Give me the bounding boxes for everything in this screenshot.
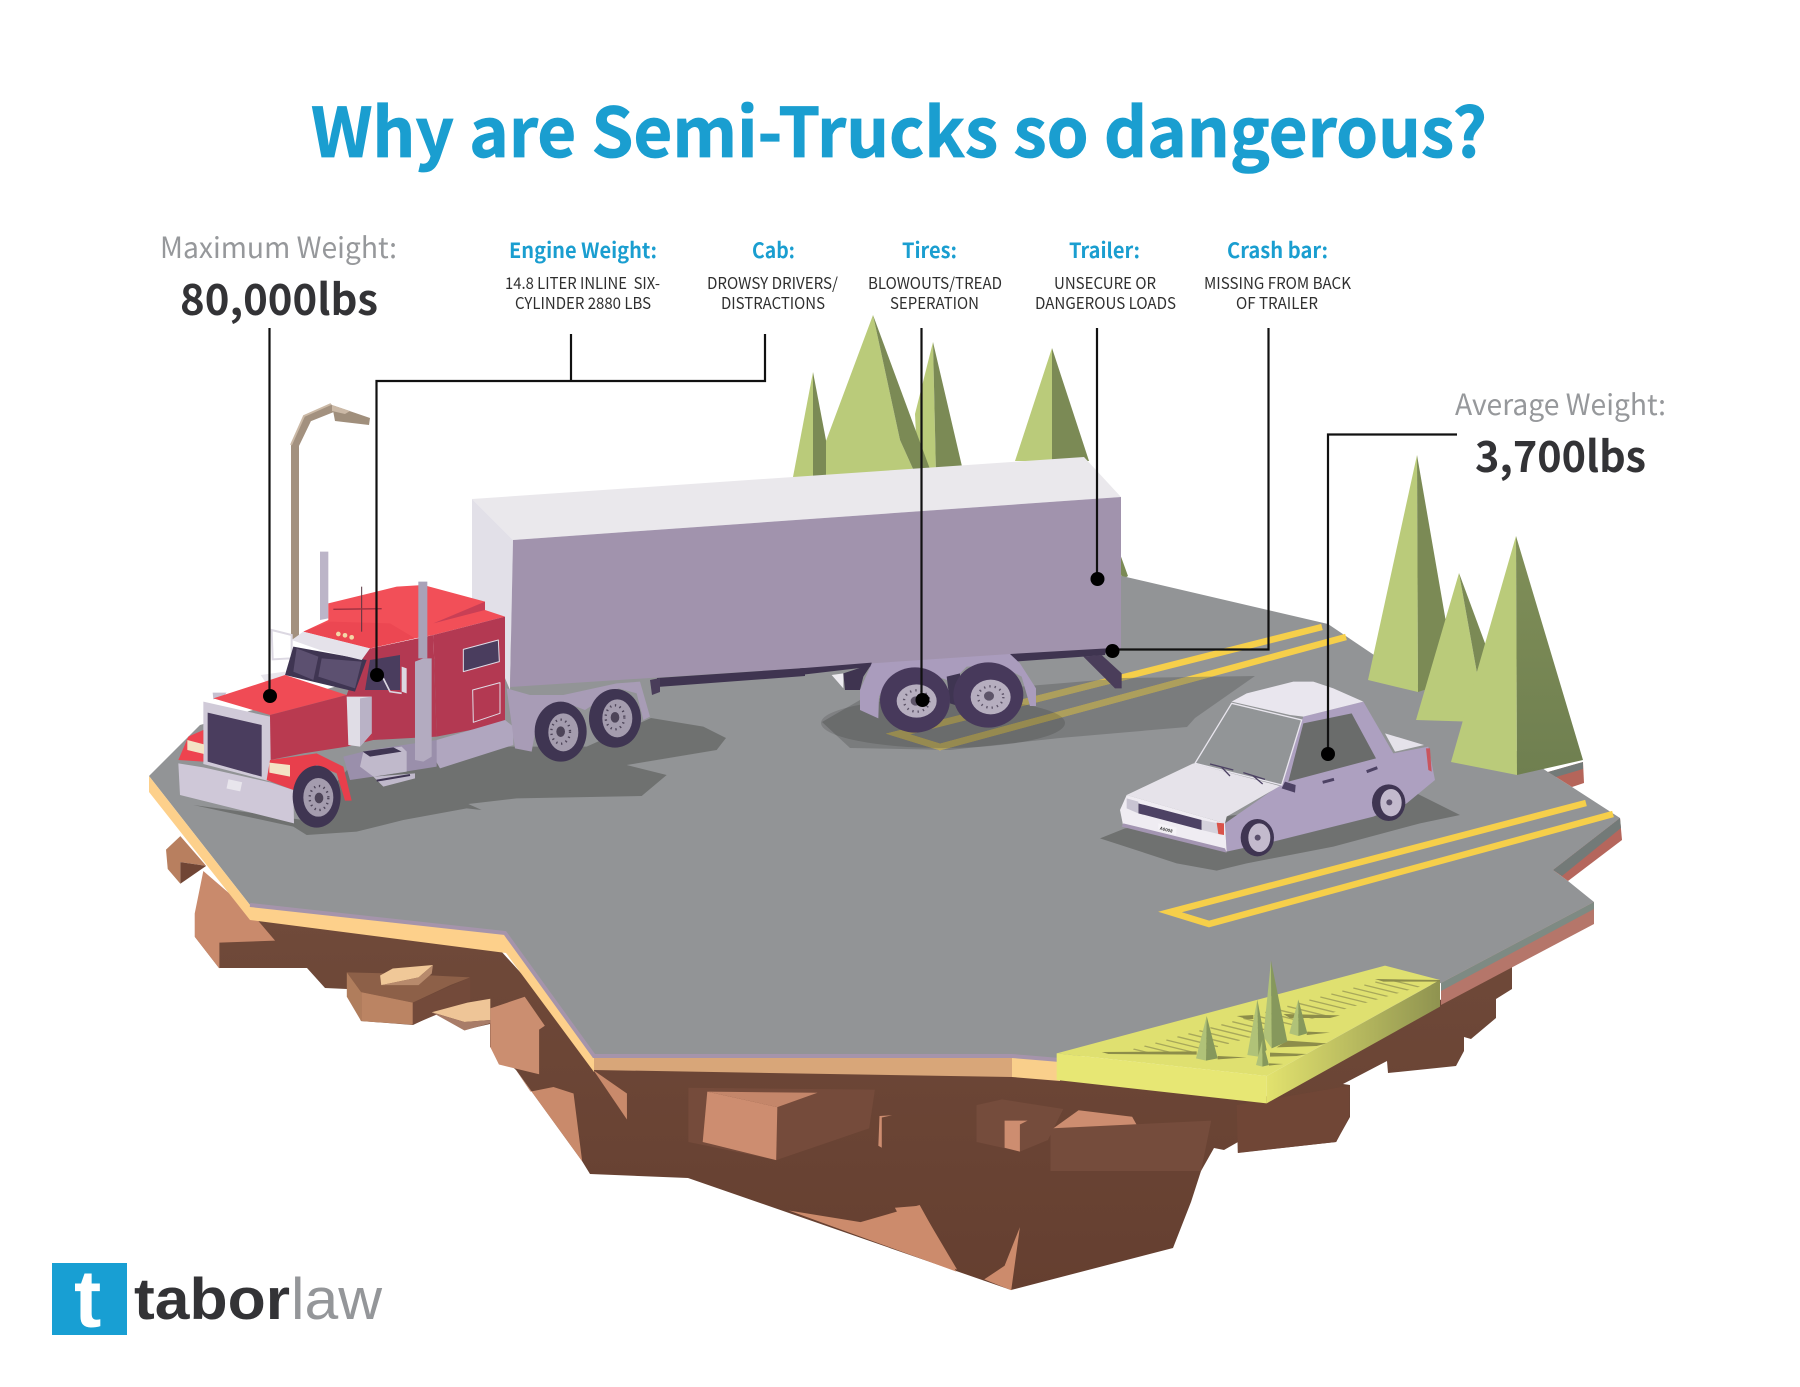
yellow road lines bbox=[898, 627, 1613, 924]
callout: crash bar: Crash bar: bbox=[1227, 235, 1328, 265]
front wheel bbox=[293, 766, 341, 828]
cab side bbox=[433, 617, 505, 737]
antenna bbox=[360, 587, 363, 632]
hatched planting strip bbox=[1133, 982, 1420, 1052]
logo bbox=[52, 1254, 383, 1345]
hood bbox=[1127, 763, 1280, 823]
callout: trailer bbox=[1035, 235, 1176, 586]
trailer bbox=[472, 457, 1121, 695]
skirt bbox=[1122, 823, 1227, 853]
logo: t bbox=[74, 1254, 101, 1345]
headlights left bbox=[187, 740, 204, 754]
windshield surround bbox=[285, 647, 367, 692]
bumper bbox=[178, 763, 294, 823]
frame bbox=[343, 740, 437, 780]
sun visor bbox=[292, 632, 370, 660]
callout: tires: Tires: bbox=[902, 235, 957, 265]
callout: tires bbox=[868, 235, 1002, 707]
trailer fender bbox=[507, 682, 650, 752]
lamp post bbox=[291, 404, 370, 640]
rear drive wheel 2 bbox=[589, 689, 641, 748]
callout: tires: SEPERATION bbox=[890, 290, 979, 314]
callout: trailer: Trailer: bbox=[1069, 235, 1140, 265]
grille bbox=[1138, 803, 1202, 830]
front wheel bbox=[1241, 819, 1274, 856]
rock facets, lit faces on the left bbox=[166, 836, 956, 1272]
callout: cab: Cab: bbox=[752, 235, 795, 265]
sleeper door bbox=[473, 683, 500, 722]
steps bbox=[360, 747, 407, 777]
headlights right bbox=[269, 763, 290, 777]
road edge highlight bbox=[250, 905, 1060, 1060]
callout: crash bar: OF TRAILER bbox=[1236, 290, 1318, 314]
callout: engine weight: Engine Weight: bbox=[509, 235, 657, 265]
air cleaner behind hood bbox=[261, 672, 285, 684]
trees behind trailer bbox=[793, 315, 1128, 580]
callout: trailer: DANGEROUS LOADS bbox=[1035, 290, 1176, 314]
logo: tabor bbox=[134, 1267, 290, 1332]
indicator bbox=[1217, 823, 1224, 835]
callout: cab bbox=[370, 235, 839, 682]
callout: cab: DISTRACTIONS bbox=[721, 290, 825, 314]
callout: crash bar bbox=[1106, 235, 1352, 658]
roof bbox=[1232, 682, 1363, 717]
rear drive wheel 1 bbox=[535, 702, 587, 762]
small trees bbox=[1196, 961, 1307, 1067]
rear wheel bbox=[1372, 784, 1405, 821]
roof bbox=[303, 585, 505, 648]
tail light bbox=[1426, 748, 1432, 772]
callout: average weight: 3,700lbs bbox=[1475, 423, 1646, 485]
mirror bracket left bbox=[272, 630, 292, 659]
hood side bbox=[270, 695, 373, 760]
car front bbox=[1120, 795, 1227, 852]
callout: average weight bbox=[1321, 382, 1666, 761]
side mirror bbox=[402, 667, 407, 693]
windshield bbox=[293, 648, 318, 680]
door mirror bbox=[1282, 782, 1296, 793]
licence plate bbox=[227, 779, 242, 791]
callout: engine weight: 14.8 LITER INLINE SIX- bbox=[505, 270, 660, 294]
callout: maximum weight: 80,000lbs bbox=[180, 266, 378, 328]
road edge bands bbox=[149, 762, 1622, 1081]
title: Why are Semi-Trucks so dangerous? bbox=[311, 78, 1487, 177]
side window bbox=[1288, 713, 1376, 782]
ground shadows of trailer bbox=[821, 676, 1254, 750]
door bbox=[347, 635, 437, 740]
road surface bbox=[149, 576, 1620, 1060]
roof lights bbox=[336, 632, 354, 640]
right-hand trees bbox=[1368, 455, 1583, 775]
callout: trailer: UNSECURE OR bbox=[1054, 270, 1156, 294]
round air tank bbox=[347, 697, 372, 747]
callout: maximum weight bbox=[160, 225, 397, 703]
callout: cab: DROWSY DRIVERS/ bbox=[707, 270, 839, 294]
trailer wheel 2 bbox=[953, 662, 1023, 728]
truck shadow bbox=[193, 718, 726, 835]
tree shadows bbox=[1102, 979, 1440, 1066]
grille bbox=[208, 713, 262, 777]
sleeper window bbox=[463, 640, 499, 672]
callout: engine weight: CYLINDER 2880 LBS bbox=[515, 290, 651, 314]
trailer wheel 1 bbox=[880, 667, 950, 733]
right fender bbox=[267, 753, 352, 801]
semi truck tractor bbox=[178, 552, 726, 835]
licence plate bbox=[1158, 823, 1177, 835]
exhaust stack bbox=[418, 582, 427, 658]
trunk bbox=[1385, 733, 1424, 752]
windshield bbox=[1195, 703, 1302, 785]
wipers and handles bbox=[1210, 764, 1377, 784]
car body side bbox=[1225, 702, 1435, 852]
grass patch bbox=[1057, 961, 1440, 1103]
car bbox=[1100, 682, 1460, 871]
logo: law bbox=[291, 1267, 383, 1332]
fuel tank under sleeper bbox=[433, 720, 513, 768]
floating rock base bbox=[166, 836, 1512, 1290]
tall rear exhaust bbox=[320, 552, 328, 620]
licence plate: A0008 bbox=[1158, 826, 1174, 835]
left fender bbox=[178, 730, 203, 762]
rear trailer bogie bbox=[800, 648, 1122, 733]
callout: crash bar: MISSING FROM BACK bbox=[1204, 270, 1352, 294]
callout: engine weight bbox=[505, 235, 660, 381]
grille frame bbox=[203, 702, 271, 782]
infographic scene bbox=[52, 102, 1664, 1335]
callout: tires: BLOWOUTS/TREAD bbox=[868, 270, 1002, 294]
side window bbox=[365, 655, 400, 690]
callout: average weight: Average Weight: bbox=[1455, 382, 1666, 424]
hood top bbox=[213, 675, 347, 715]
headlights bbox=[1127, 798, 1138, 813]
car shadow bbox=[1100, 793, 1460, 871]
callout: maximum weight: Maximum Weight: bbox=[160, 225, 397, 267]
